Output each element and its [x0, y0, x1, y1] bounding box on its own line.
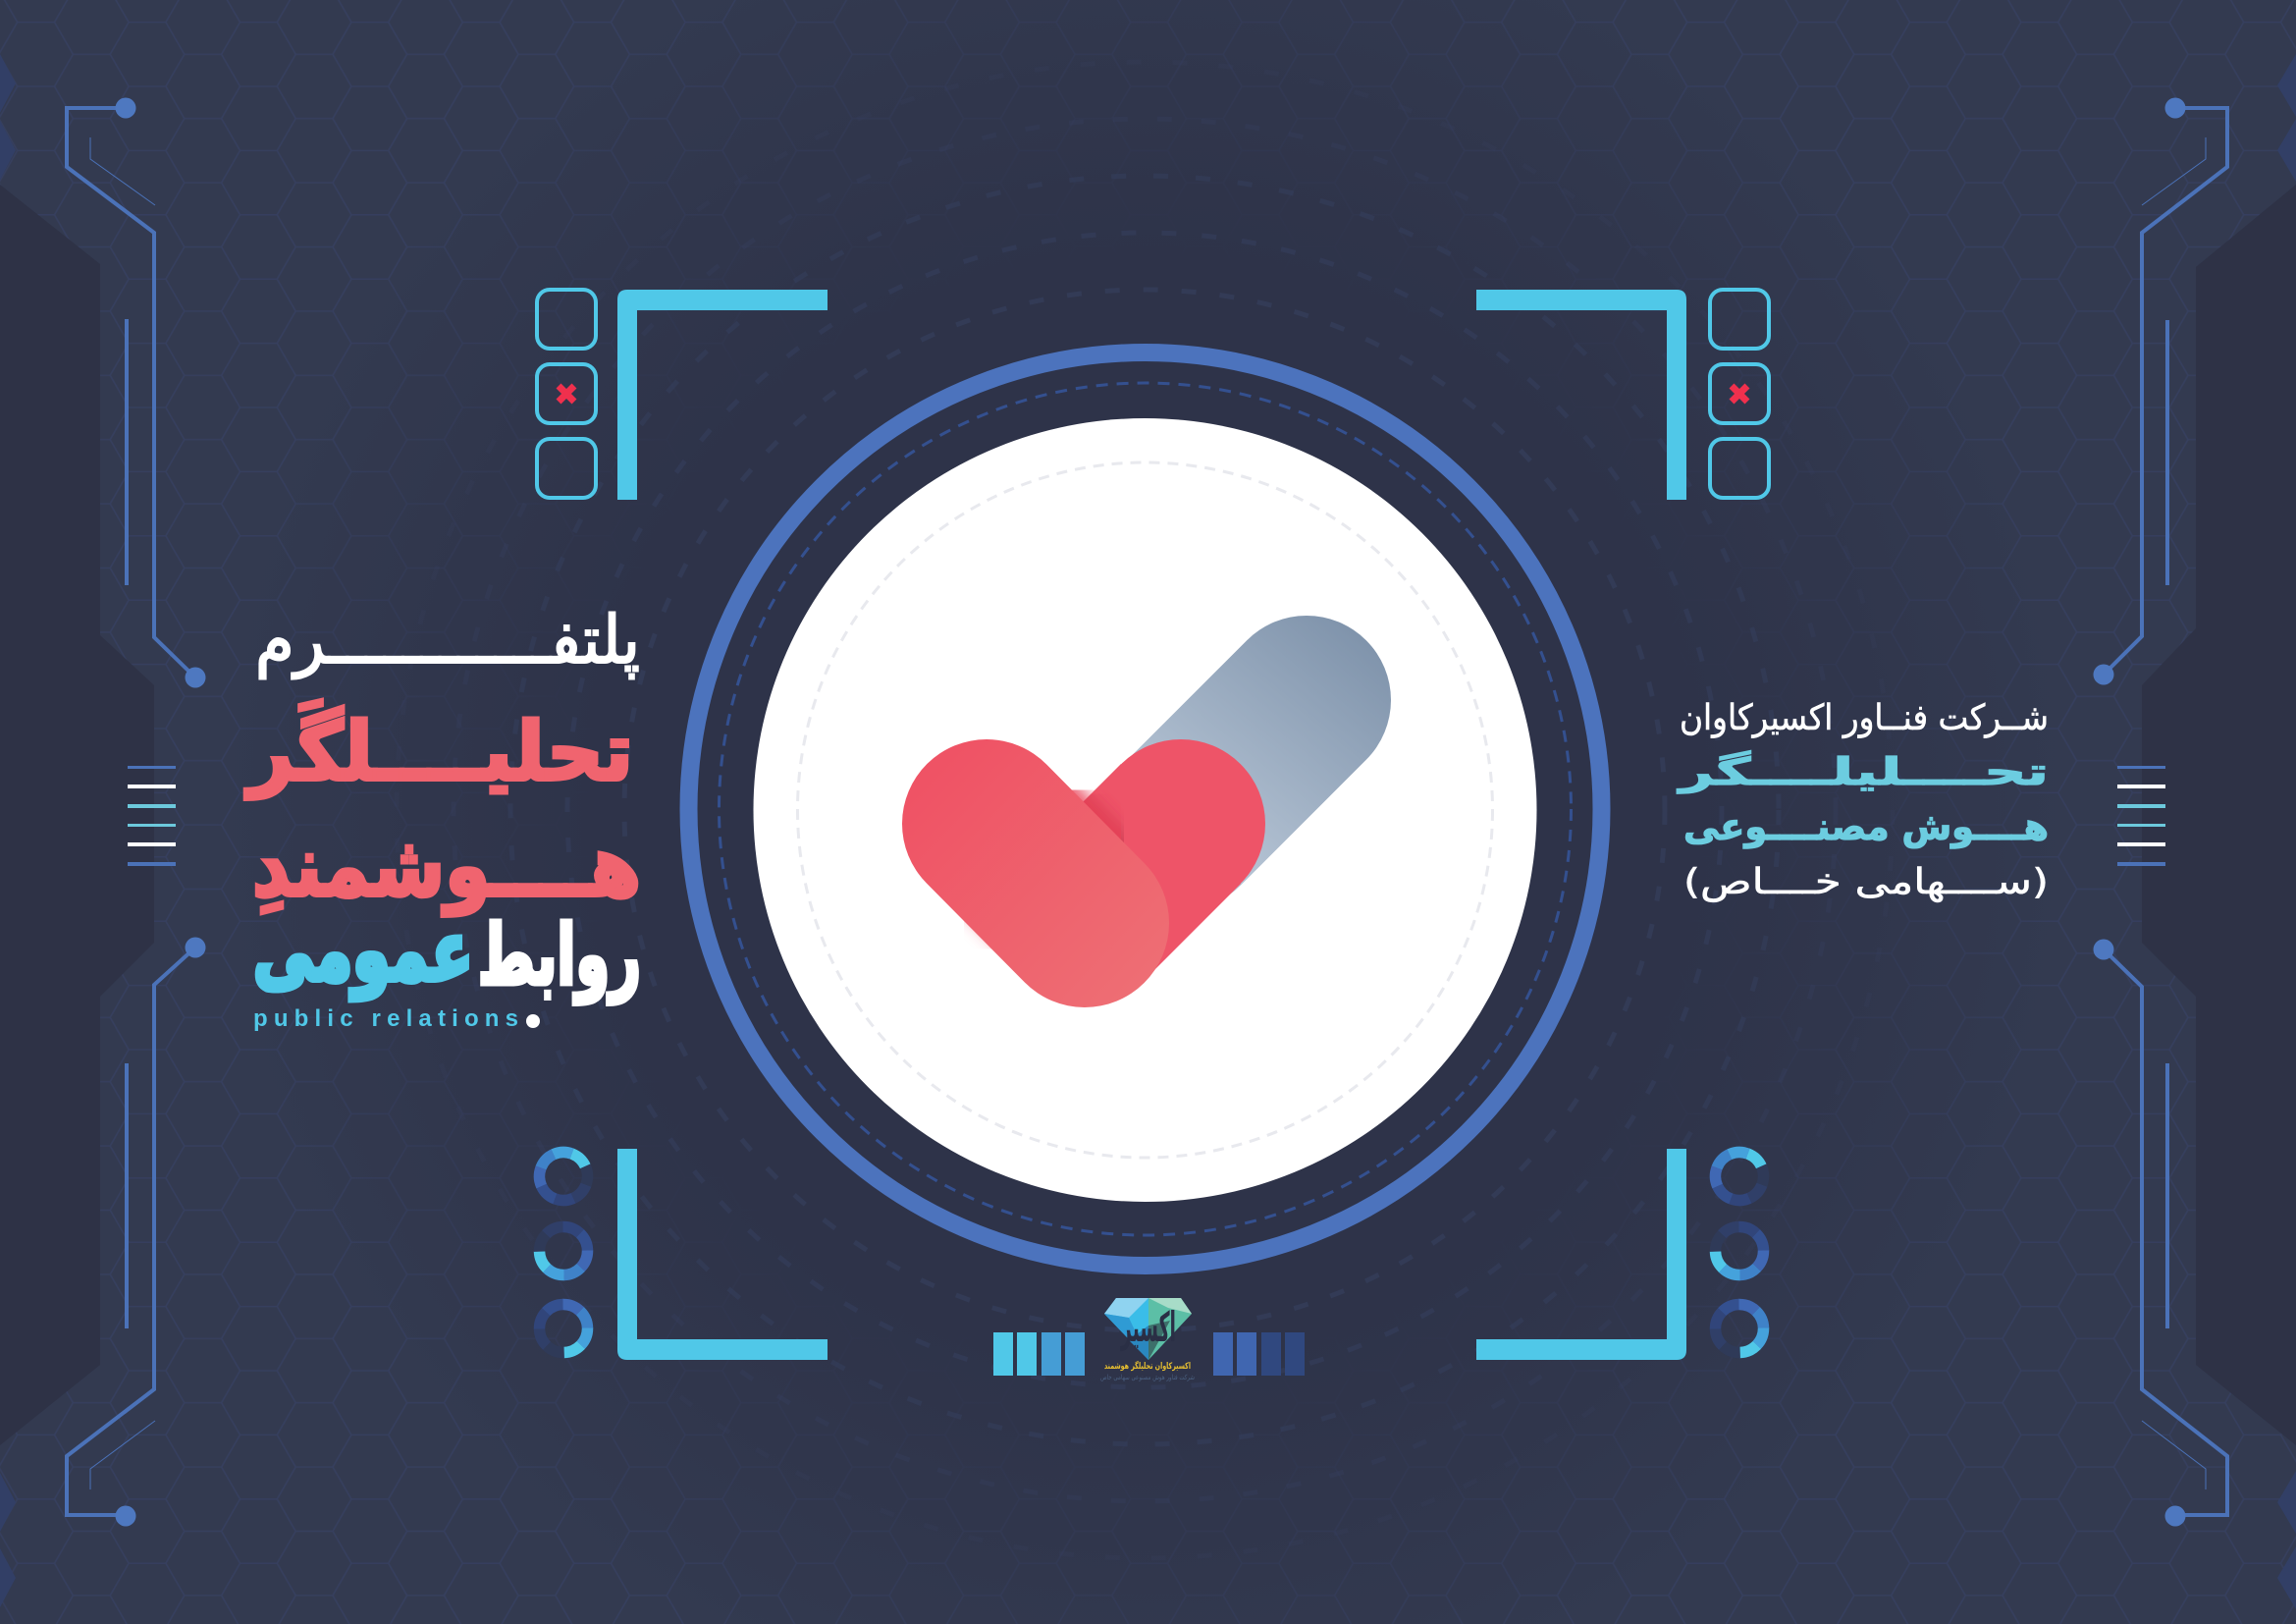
title block: left: [244, 602, 641, 1032]
bracket: bottom left: [617, 1149, 828, 1360]
logo: diamond: [1100, 1298, 1195, 1381]
company text: right: [1677, 698, 2049, 902]
text: company line 3: هــــوش مصنــــوعی: [1683, 805, 2049, 848]
logotype: public relations persian: عمومی: [253, 903, 473, 1001]
panel: right dark side shape: [2142, 185, 2296, 1445]
heading: smart: هــــوشمندِ: [252, 818, 641, 916]
text: company line 1: شــرکت فنــاور اکسیرکاوان: [1680, 698, 2049, 738]
progress rings: left: [515, 1132, 612, 1377]
circuit: bottom left: [67, 937, 206, 1526]
checkboxes: right: [1710, 290, 1769, 498]
logotype: public relations persian: روابط: [478, 907, 641, 1004]
progress rings: right: [1691, 1132, 1788, 1377]
bracket: top left: [617, 290, 828, 500]
logo: diamond: اکسیر: [1120, 1303, 1176, 1352]
bars: left: [993, 1332, 1085, 1376]
bars: right: [1213, 1332, 1305, 1376]
central circle: [689, 352, 1602, 1266]
icon: check mark: [987, 700, 1307, 970]
side ticks: right: [2117, 766, 2165, 866]
text: company line 2: تحــــلیلــــگر: [1677, 750, 2049, 793]
circuit: top right: [2093, 98, 2227, 685]
logotype: dot: [526, 1014, 540, 1028]
side ticks: left: [128, 766, 176, 866]
panel: left dark side shape: [0, 185, 154, 1445]
logotype: english tagline: public relations: [253, 1005, 518, 1032]
text: company line 4: (ســــهامی خــــاص): [1683, 862, 2049, 902]
bracket: top right: [1476, 290, 1686, 500]
circuit: bottom right: [2093, 939, 2227, 1526]
circuit: top left: [67, 98, 206, 687]
logo: tagline: اکسیرکاوان تحلیلگر هوشمند: [1104, 1360, 1191, 1372]
checkboxes: left: [537, 290, 596, 498]
logo: sub tagline: شرکت فناور هوش مصنوعی سهامی خاص: [1100, 1374, 1195, 1381]
heading: analyst: تحلیــــلگَر: [244, 699, 633, 799]
heading: platform: پلتفــــــــــــرم: [255, 602, 640, 679]
bracket: bottom right: [1476, 1149, 1686, 1360]
